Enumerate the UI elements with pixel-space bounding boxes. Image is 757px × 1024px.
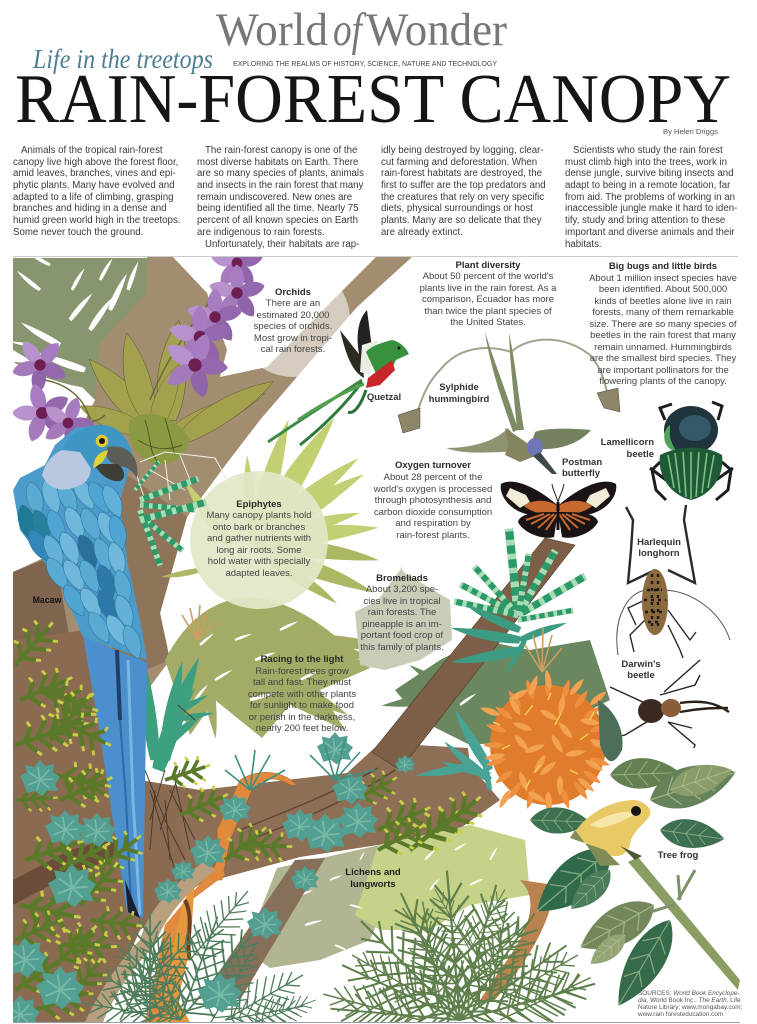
palm frond top left — [10, 251, 147, 405]
callout: bromeliads: About 3,200 spe- — [366, 584, 438, 595]
callout: oxygen turnover: About 28 percent of the — [384, 472, 482, 483]
macaw body and feathers — [13, 425, 147, 661]
intro column 4: important and diverse animals and their — [565, 227, 735, 238]
intro column 1: branches and hiding in a dense and — [13, 203, 167, 214]
macaw head — [62, 425, 133, 470]
intro column 3: are already extinct. — [381, 227, 463, 238]
orchid flowers — [13, 257, 264, 442]
lower left brown tree mass — [13, 630, 205, 1022]
intro column 4: inaccessible jungle make it hard to iden- — [565, 203, 737, 214]
callout: bromeliads: pineapple is an im- — [362, 619, 442, 630]
callout: orchids: Orchids — [275, 287, 311, 298]
intro column 3: the creatures that rely on very specific — [381, 192, 544, 203]
intro column 1: canopy live high above the forest floor, — [13, 157, 178, 168]
callout: plant diversity: the United States. — [450, 317, 526, 328]
label: Harlequin longhorn: longhorn — [638, 548, 680, 559]
intro column 2: percent of all known species on Earth — [197, 215, 358, 226]
callout: big bugs and little birds: flowering plants of the canopy. — [599, 376, 727, 387]
callout: bromeliads: cies live in tropical — [363, 596, 441, 607]
callout: big bugs and little birds: beetles in the rain forest that many — [590, 330, 736, 341]
callout: big bugs and little birds: remain unnamed. Hummingbirds — [594, 342, 732, 353]
intro column 2: are indigenous to rain forests. — [197, 227, 325, 238]
intro column 2: The rain-forest canopy is one of the — [205, 145, 357, 156]
intro column 1: humid green world high in the treetops. — [13, 215, 180, 226]
callout: plant diversity — [420, 260, 557, 328]
label: Darwin's beetle: Darwin's — [621, 659, 661, 670]
callout: racing to the light: compete with other plants — [248, 689, 356, 700]
intro column 2: being identified all the time. Nearly 75 — [197, 203, 359, 214]
postman butterfly — [501, 482, 616, 538]
pale text circle for epiphytes — [190, 471, 328, 609]
callout: orchids: Most grow in tropi- — [254, 333, 332, 344]
callout: racing to the light — [248, 654, 356, 734]
callout: plant diversity: Plant diversity — [456, 260, 521, 271]
callout: big bugs and little birds: Big bugs and little birds — [609, 261, 717, 272]
callout: racing to the light: or perish in the darkness, — [249, 712, 355, 723]
bottom rule — [13, 1022, 740, 1024]
label: Quetzal: Quetzal — [367, 392, 401, 403]
kicker: Life in the treetops: Life in the treetops — [32, 44, 213, 74]
callout: orchids: species of orchids. — [254, 321, 332, 332]
intro column 4: tify, study and bring attention to these — [565, 215, 725, 226]
callout: racing to the light: Rain-forest trees grow — [255, 666, 349, 677]
label: Postman butterfly: butterfly — [562, 468, 601, 479]
callout: big bugs and little birds — [589, 261, 737, 387]
intro column 2: are so many species of plants, animals — [197, 168, 364, 179]
sources: SOURCES: World Book Encyclope- — [638, 990, 740, 997]
macaw tail — [83, 635, 147, 918]
callout: orchids: There are an — [266, 298, 320, 309]
callout: big bugs and little birds: are important pollinators for the — [597, 365, 729, 376]
sources: Nature Library; www.mongabay.com; — [638, 1004, 743, 1011]
bromeliad striped plant — [450, 529, 585, 676]
callout: big bugs and little birds: forests, many of them remarkable — [592, 307, 734, 318]
intro column 4: must climb high into the trees, work in — [565, 157, 727, 168]
callout: epiphytes — [206, 499, 312, 579]
teal palm tufts on branch — [225, 740, 375, 790]
callout: racing to the light: nearly 200 feet below. — [256, 723, 348, 734]
intro column 4: dense jungle, survive biting insects and — [565, 168, 734, 179]
callout: oxygen turnover — [373, 460, 492, 541]
intro column 3: cut farming and deforestation. When — [381, 157, 537, 168]
callout: big bugs and little birds: are the smallest bird species. They — [590, 353, 737, 364]
callout: oxygen turnover: world's oxygen is processed — [373, 484, 492, 495]
callout: epiphytes: hold water with specially — [208, 556, 310, 567]
thin diagonal branch — [372, 538, 575, 770]
intro column 2: remain undiscovered. New ones are — [197, 192, 352, 203]
callout: bromeliads: this family of plants. — [360, 642, 444, 653]
callout: epiphytes: onto bark or branches — [213, 522, 305, 533]
large palm frond behind epiphytes text — [160, 411, 390, 740]
intro column 2: most diverse habitats on Earth. There — [197, 157, 358, 168]
masthead: World of Wonder: of — [333, 4, 367, 56]
callout: epiphytes: Many canopy plants hold — [206, 510, 312, 521]
title: Rain-Forest Canopy: RAIN-FOREST CANOPY — [15, 61, 731, 138]
label: Sylphide hummingbird: Sylphide — [439, 382, 479, 393]
tree frog — [570, 800, 650, 866]
orange flower cluster — [479, 669, 613, 813]
main lower branch — [200, 745, 500, 878]
callout: big bugs and little birds: About 1 million insect species have — [589, 273, 737, 284]
callout: racing to the light: for sunlight to make food — [250, 700, 354, 711]
left fan palm lattice — [82, 890, 316, 1022]
label: Lichens and lungworts: lungworts — [350, 879, 396, 890]
lamellicorn beetle — [650, 402, 733, 500]
callout: bromeliads: rain forests. The — [368, 607, 436, 618]
small bromeliad spike — [182, 605, 562, 672]
sources: dia, World Book Inc.; The Earth, Life — [638, 997, 741, 1004]
intro column 4: from aid. The problems of working in an — [565, 192, 735, 203]
orchid plant leaves — [75, 319, 278, 500]
label: Lamellicorn beetle: beetle — [627, 449, 654, 460]
callout: plant diversity: About 50 percent of the world's — [423, 271, 554, 282]
intro column 1: Animals of the tropical rain-forest — [21, 145, 163, 156]
label: Lamellicorn beetle: Lamellicorn — [601, 437, 654, 448]
tagline: EXPLORING THE REALMS OF HISTORY, SCIENCE, NATURE AND TECHNOLOGY — [233, 61, 497, 68]
sources: www.rain foresteducation.com — [637, 1011, 723, 1018]
intro column 4: Scientists who study the rain forest — [573, 145, 723, 156]
label: Postman butterfly: Postman — [562, 457, 602, 468]
callout: big bugs and little birds: been identified. About 500,000 — [599, 284, 727, 295]
callout: oxygen turnover: Oxygen turnover — [395, 460, 471, 471]
intro column 4: habitats. — [565, 239, 602, 250]
macaw pale neck — [42, 447, 91, 490]
masthead: World of Wonder — [216, 4, 507, 56]
callout: bromeliads: Bromeliads — [376, 573, 428, 584]
callout: oxygen turnover: through photosynthesis and — [375, 495, 491, 506]
label: Darwin's beetle: beetle — [627, 670, 655, 681]
striped epiphyte — [135, 462, 206, 565]
label: Harlequin longhorn: Harlequin — [637, 537, 681, 548]
intro column 1: phytic plants. Many have evolved and — [13, 180, 175, 191]
intro column 3: first to suffer are the top predators and — [381, 180, 546, 191]
macaw — [13, 425, 147, 918]
masthead: World of Wonder: Wonder — [366, 4, 507, 56]
intro column 2: and insects in the rain forest that many — [197, 180, 364, 191]
label: Macaw: Macaw — [33, 595, 62, 605]
callout: oxygen turnover: carbon dioxide consumption — [374, 507, 492, 518]
callout: bromeliads: portant food crop of — [361, 630, 444, 641]
label: Lichens and lungworts: Lichens and — [345, 867, 401, 878]
lianas — [85, 770, 555, 1022]
intro column 3: idly being destroyed by logging, clear- — [381, 145, 544, 156]
dark frond behind orange flower — [380, 640, 610, 745]
callout: racing to the light: Racing to the light — [261, 654, 344, 665]
intro column 3: plants. Many are so delicate that they — [381, 215, 542, 226]
pale frond behind bromeliads text — [355, 565, 452, 670]
harlequin longhorn — [617, 505, 730, 658]
callout: orchids: cal rain forests. — [261, 344, 325, 355]
callout: plant diversity: plants live in the rain forest. As a — [420, 283, 557, 294]
label: Sylphide hummingbird: hummingbird — [429, 394, 490, 405]
macaw eye — [96, 435, 108, 447]
callout: big bugs and little birds: size. There are so many species of — [589, 319, 737, 330]
macaw beak — [93, 446, 137, 481]
callout: plant diversity: comparison, Ecuador has more — [422, 294, 554, 305]
intro column 2: Unfortunately, their habitats are rap- — [205, 239, 359, 250]
upper tree trunk and branch — [13, 257, 412, 700]
intro column 3: diets, physical surroundings or host — [381, 203, 533, 214]
callout: plant diversity: than twice the plant species of — [424, 306, 552, 317]
callout: orchids: estimated 20,000 — [257, 310, 329, 321]
callout: epiphytes: Epiphytes — [236, 499, 282, 510]
callout: epiphytes: and gather nutrients with — [207, 533, 311, 544]
quetzal — [268, 310, 409, 445]
callout: bromeliads — [360, 573, 444, 653]
byline: By Helen Driggs — [663, 127, 718, 136]
hummingbird — [398, 332, 620, 474]
teal plant by flower — [415, 707, 494, 791]
pale text circle for orchids — [262, 291, 350, 377]
teal plant beside macaw tail — [146, 658, 214, 868]
intro column 4: adapt to being in a remote location, far — [565, 180, 731, 191]
teal lichen tufts — [0, 732, 415, 1024]
callout: racing to the light: tall and fast. They must — [253, 677, 351, 688]
darwin's beetle — [610, 660, 729, 748]
callout: epiphytes: adapted leaves. — [225, 568, 293, 579]
leaves on frog stem — [524, 753, 741, 1015]
dark leaf behind flower — [598, 700, 623, 761]
right fan palm — [318, 868, 603, 1024]
intro column 1: Some never touch the ground. — [13, 227, 143, 238]
callout: oxygen turnover: rain-forest plants. — [396, 530, 470, 541]
callout: orchids — [254, 287, 332, 355]
intro column 3: rain-forest habitats are destroyed, the — [381, 168, 542, 179]
thin branch lower centre — [210, 858, 325, 1000]
illustration: forest canopy — [0, 236, 741, 1024]
label: Tree frog: Tree frog — [658, 850, 699, 861]
callout: big bugs and little birds: kinds of beetles alone live in rain — [594, 296, 732, 307]
olive and yellow green fronds below branch — [245, 825, 530, 968]
callout: oxygen turnover: and respiration by — [395, 518, 471, 529]
masthead: World of Wonder: World — [216, 4, 328, 56]
intro column 1: adapted to a life of climbing, grasping — [13, 192, 173, 203]
intro column 1: amid leaves, branches, vines and epi- — [13, 168, 176, 179]
moss sprigs lower left — [0, 611, 491, 1023]
callout: epiphytes: long air roots. Some — [216, 545, 302, 556]
